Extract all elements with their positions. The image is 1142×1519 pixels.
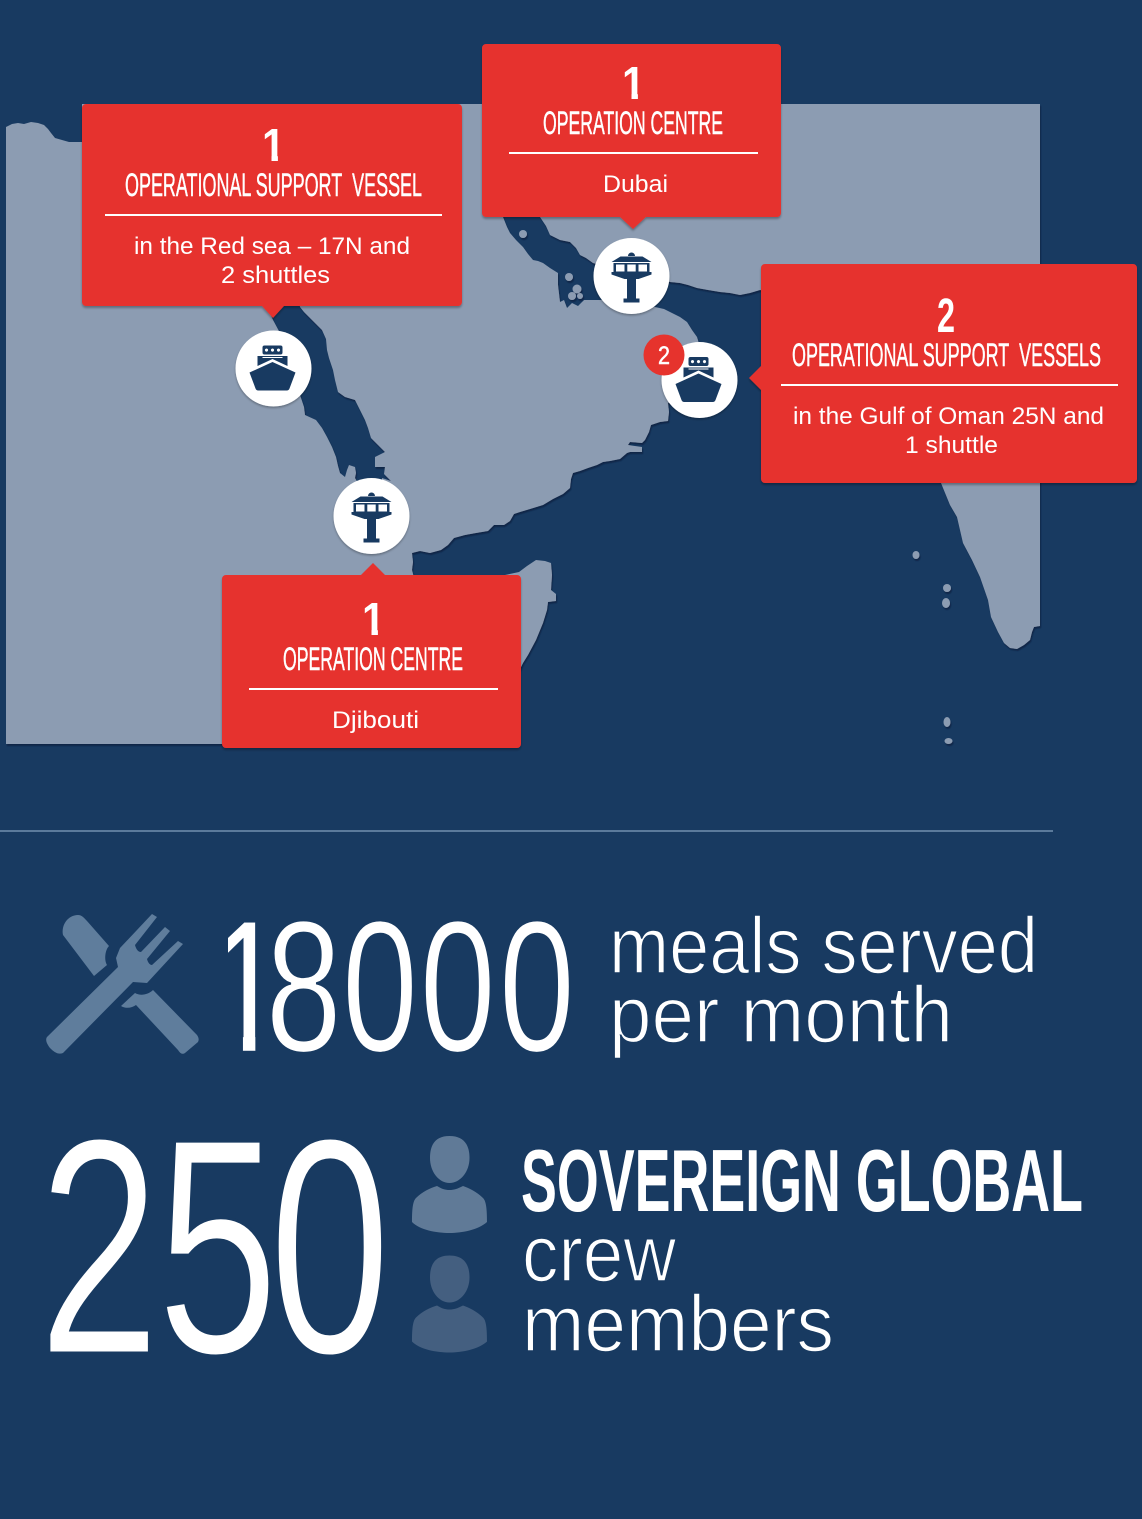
icon: ship marker, Red Sea xyxy=(236,330,312,406)
text: crew members: crew xyxy=(522,1209,676,1298)
stat: meals label: meals served xyxy=(609,901,1038,990)
callout: operational support vessels, Gulf of Oman xyxy=(749,264,1137,483)
icon: control tower marker, Dubai xyxy=(594,238,670,314)
text: crew members: members xyxy=(522,1279,834,1368)
callout: operational support vessel, Red Sea: OPERATIONAL SUPPORT VESSEL xyxy=(125,167,422,203)
callout: operation centre, Djibouti: 1 xyxy=(362,593,385,645)
map: land masses xyxy=(6,104,1040,744)
stat: meals number: 1 xyxy=(209,882,285,1091)
callout: operational support vessels, Gulf of Oman: 1 shuttle xyxy=(905,432,998,459)
callout: operation centre, Djibouti: Djibouti xyxy=(332,707,419,734)
callout: operational support vessel, Red Sea: 2 shuttles xyxy=(221,262,330,289)
callout: operational support vessels, Gulf of Oman: 2 xyxy=(937,290,955,343)
callout: operation centre, Dubai: Dubai xyxy=(603,171,668,198)
stat: meals number: 8000 xyxy=(266,882,575,1091)
badge: two vessels: 2 xyxy=(658,342,670,370)
callout: operational support vessel, Red Sea xyxy=(82,104,462,318)
icon: fork and knife xyxy=(46,914,199,1054)
icon: person, lower xyxy=(412,1256,487,1352)
map: islands xyxy=(519,230,952,744)
callout: operational support vessel, Red Sea: in the Red sea – 17N and xyxy=(134,233,410,260)
callout: operation centre, Dubai: 1 xyxy=(622,57,645,109)
badge: two vessels xyxy=(644,334,684,376)
icon: person, upper xyxy=(412,1136,487,1233)
stat: crew number: 250 xyxy=(38,1074,391,1419)
callout: operation centre, Dubai xyxy=(482,44,781,229)
stat: meals number xyxy=(228,921,569,1052)
text: crew members xyxy=(522,1209,834,1368)
callout: operation centre, Djibouti: OPERATION CENTRE xyxy=(283,641,463,677)
callout: operation centre, Djibouti xyxy=(222,563,521,748)
stat: meals label: per month xyxy=(609,970,953,1059)
callout: operational support vessels, Gulf of Oman: in the Gulf of Oman 25N and xyxy=(793,403,1104,430)
icon: ship marker, Gulf of Oman xyxy=(662,342,738,418)
callout: operational support vessel, Red Sea: 1 xyxy=(262,119,285,171)
icon: control tower marker, Djibouti xyxy=(334,478,410,554)
callout: operation centre, Dubai: OPERATION CENTRE xyxy=(543,105,723,141)
stat: meals label xyxy=(609,901,1038,1059)
